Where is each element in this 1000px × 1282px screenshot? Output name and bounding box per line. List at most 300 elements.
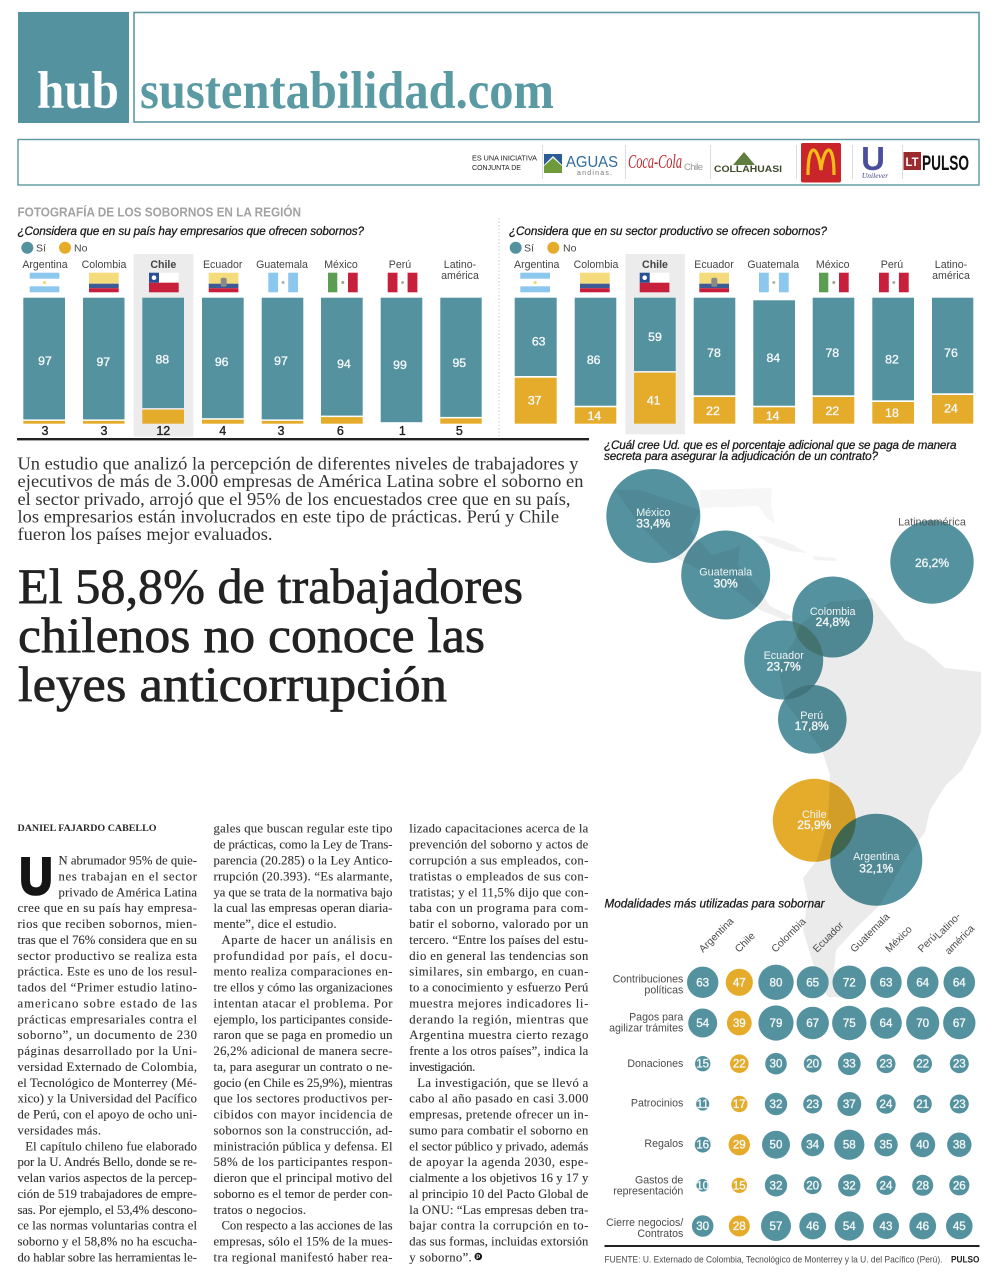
article column 2: parencia (20.285) o la Ley Antico- bbox=[214, 854, 392, 868]
row: Patrocinios: 11 bbox=[697, 1098, 709, 1111]
label: Latinoamérica: 26,2% bbox=[915, 556, 949, 570]
column: Colombia: Colombia bbox=[574, 259, 618, 271]
column headers: Chile bbox=[733, 931, 758, 955]
column: Latinoamérica: 5 bbox=[456, 424, 463, 438]
sponsors intro text bbox=[472, 154, 538, 172]
row: Cierre negocios / Contratos: 45 bbox=[953, 1220, 966, 1233]
article column 2: dieron que el principal motivo del bbox=[214, 1171, 393, 1185]
logo: LT Pulso: LT bbox=[906, 155, 919, 169]
label: Argentina: Argentina bbox=[853, 851, 899, 863]
icon: end mark: P bbox=[476, 1255, 480, 1261]
article column 2: cibidos con mayor incidencia de bbox=[214, 1108, 393, 1122]
column headers: Argentina bbox=[697, 916, 736, 955]
row: Contribuciones políticas: 63 bbox=[880, 976, 892, 989]
row: Gastos de representación bbox=[613, 1174, 969, 1197]
Chile highlight bbox=[134, 254, 193, 437]
column headers: américa bbox=[943, 923, 977, 957]
article column 3: corrupción a sus empleados, con- bbox=[409, 854, 588, 868]
column headers: Guatemala bbox=[849, 912, 892, 955]
row: Patrocinios: 21 bbox=[916, 1098, 929, 1111]
article column 1: tados del “Primer estudio latino- bbox=[18, 980, 197, 994]
column: Colombia: 86 bbox=[587, 353, 601, 367]
label: México: 33,4% bbox=[636, 516, 671, 530]
article column 3: taba con un programa para com- bbox=[409, 901, 588, 915]
article column 3: dio en general las tendencias son bbox=[409, 949, 589, 963]
row: Pagos para agilizar trámites: Pagos para bbox=[629, 1012, 683, 1024]
Chile highlight bbox=[625, 254, 685, 434]
row: Donaciones: 22 bbox=[733, 1058, 746, 1071]
row: Gastos de representación: 24 bbox=[880, 1179, 893, 1192]
column: Argentina: 97 bbox=[38, 354, 52, 368]
logo: Collahuasi: COLLAHUASI bbox=[714, 164, 782, 175]
article column 3: frente a los otros países”, indica la bbox=[409, 1044, 589, 1058]
article column 1: rios que reciben sobornos, mien- bbox=[18, 917, 197, 931]
row: Gastos de representación: representación bbox=[613, 1185, 683, 1197]
article column 3: batir el soborno, valorado por un bbox=[409, 917, 589, 931]
row: Pagos para agilizar trámites: 67 bbox=[806, 1017, 819, 1030]
article column 2: soborno es el temor de perder con- bbox=[214, 1187, 392, 1201]
map question bbox=[604, 439, 957, 463]
article column 1: do hablar sobre las herramientas le- bbox=[18, 1250, 197, 1264]
chart question: ¿Considera que en su país hay empresarios que ofrecen sobornos? bbox=[18, 225, 364, 238]
legend bbox=[510, 242, 577, 254]
intro paragraph: fueron los países mejor evaluados. bbox=[18, 524, 272, 544]
row: Regalos: 40 bbox=[916, 1139, 929, 1152]
byline: DANIEL FAJARDO CABELLO bbox=[18, 823, 157, 834]
column: Chile bbox=[142, 259, 184, 438]
row: Patrocinios: 37 bbox=[843, 1098, 856, 1111]
article column 1: práctica. Este es uno de los resul- bbox=[18, 965, 197, 979]
article column 3: lizado capacitaciones acerca de la bbox=[409, 822, 589, 836]
article column 2: 58% de los participantes respon- bbox=[214, 1155, 392, 1169]
logo: Unilever bbox=[852, 140, 903, 180]
headline bbox=[18, 558, 523, 712]
article column 2: intentan atacar el problema. Por bbox=[214, 996, 393, 1010]
row: Gastos de representación: 32 bbox=[843, 1179, 856, 1192]
row: Patrocinios: 23 bbox=[953, 1098, 966, 1111]
article column 1: sector productivo se realiza esta bbox=[18, 949, 197, 963]
map question: secreta para asegurar la adjudicación de un contrato? bbox=[604, 450, 878, 463]
header: hub logo block bbox=[18, 12, 129, 123]
row: Gastos de representación: 26 bbox=[953, 1179, 966, 1192]
article column 1: prácticas empresariales contra el bbox=[18, 1012, 197, 1026]
column: México: 78 bbox=[825, 346, 839, 360]
article column 1: soborno”, un documento de 230 bbox=[18, 1028, 197, 1042]
row: Contribuciones políticas: 80 bbox=[770, 976, 782, 989]
map: Latin America bbox=[615, 488, 981, 997]
row: Pagos para agilizar trámites: 67 bbox=[953, 1017, 966, 1030]
column: Chile: 59 bbox=[648, 330, 662, 344]
column: Guatemala: 84 bbox=[766, 351, 780, 365]
column: Perú bbox=[381, 259, 422, 438]
article column 3: empresas, pretende ofrecer un in- bbox=[409, 1108, 588, 1122]
logo: Coca-Cola Chile: Coca-Cola bbox=[628, 151, 682, 173]
row: Cierre negocios / Contratos: 46 bbox=[806, 1220, 819, 1233]
header: site name box bbox=[134, 12, 979, 122]
label: Guatemala bbox=[699, 566, 752, 590]
drop cap: U bbox=[20, 848, 52, 906]
row: Pagos para agilizar trámites: 54 bbox=[696, 1017, 710, 1030]
row: Patrocinios bbox=[631, 1092, 969, 1116]
column: Perú: 99 bbox=[393, 358, 407, 372]
article column 1 bbox=[18, 848, 198, 1264]
column: Guatemala: Guatemala bbox=[747, 259, 799, 271]
article column 2: ta, para asegurar un contrato o ne- bbox=[214, 1060, 392, 1074]
column: Chile: 41 bbox=[647, 394, 661, 408]
row: Cierre negocios / Contratos: Contratos bbox=[637, 1228, 683, 1240]
logo: Aguas Andinas: andinas. bbox=[577, 170, 612, 177]
column: Colombia: 97 bbox=[96, 355, 110, 369]
label: Ecuador: 23,7% bbox=[767, 660, 801, 674]
row: Contribuciones políticas: Contribuciones bbox=[613, 973, 683, 985]
article column 2: ejemplo, los participantes conside- bbox=[214, 1012, 392, 1026]
column: México: México bbox=[324, 259, 358, 271]
article column 2: tre ellos y cómo las organizaciones bbox=[214, 980, 393, 994]
row: Patrocinios: 17 bbox=[733, 1098, 746, 1111]
article column 3: tercero. “Entre los países del estu- bbox=[409, 933, 588, 947]
column: Colombia: 14 bbox=[587, 409, 601, 423]
column: Perú: 18 bbox=[885, 406, 899, 420]
article column 3: investigación. bbox=[409, 1060, 475, 1074]
label: Argentina: 32,1% bbox=[859, 862, 894, 876]
column: Guatemala: 14 bbox=[766, 409, 780, 423]
row: Gastos de representación: 32 bbox=[770, 1179, 782, 1192]
modalities heading: Modalidades más utilizadas para sobornar bbox=[604, 898, 826, 910]
legend: Sí bbox=[36, 242, 46, 254]
article column 2: raron que se paga en promedio un bbox=[214, 1028, 393, 1042]
row: Gastos de representación: 10 bbox=[696, 1179, 709, 1192]
column: Guatemala: 97 bbox=[274, 354, 288, 368]
article column 3: de apoyar la agenda 2030, espe- bbox=[409, 1155, 588, 1169]
column headers: Latino- bbox=[933, 911, 963, 941]
article column 3: tratistas; y el 11,5% dijo que con- bbox=[409, 885, 588, 899]
article column 3: tratistas o empleados de sus con- bbox=[409, 869, 588, 883]
column: Argentina: 63 bbox=[532, 334, 546, 348]
row: Pagos para agilizar trámites: 79 bbox=[770, 1017, 782, 1030]
column: Chile: Chile bbox=[642, 259, 668, 271]
article column 1: N abrumador 95% de quie- bbox=[58, 854, 197, 868]
article column 3: cabo al año pasado en casi 3.000 bbox=[409, 1092, 588, 1106]
label: Colombia: Colombia bbox=[810, 606, 856, 618]
row: Regalos: 16 bbox=[696, 1139, 709, 1152]
article column 1: versidades más. bbox=[18, 1124, 101, 1138]
panel: bribery in country chart bbox=[18, 225, 482, 438]
row: Donaciones: 15 bbox=[696, 1058, 709, 1071]
column: Perú: Perú bbox=[389, 259, 411, 271]
headline: chilenos no conoce las bbox=[18, 607, 485, 663]
column: Ecuador: 22 bbox=[706, 404, 720, 418]
label: México: México bbox=[636, 507, 670, 519]
column: Colombia: Colombia bbox=[82, 259, 126, 271]
label: Argentina bbox=[853, 851, 899, 876]
intro paragraph: ejecutivos de más de 3.000 empresas de América Latina sobre el soborno en bbox=[18, 471, 584, 491]
label: Guatemala: Guatemala bbox=[699, 566, 752, 578]
source note: PULSO bbox=[951, 1255, 980, 1265]
row: Cierre negocios / Contratos bbox=[606, 1211, 973, 1241]
row: Regalos: 58 bbox=[843, 1139, 856, 1152]
article column 1: privado de América Latina bbox=[58, 885, 197, 899]
column: Guatemala: 3 bbox=[278, 424, 285, 438]
label: México bbox=[636, 507, 671, 530]
article column 1: por la U. Andrés Bello, donde se re- bbox=[18, 1155, 197, 1169]
article column 2: Con respecto a las acciones de las bbox=[222, 1219, 393, 1233]
row: Donaciones: Donaciones bbox=[627, 1058, 683, 1070]
label: Latinoamérica bbox=[898, 516, 966, 570]
article column 2: gocio (en Chile es 25,9%), mientras bbox=[214, 1076, 393, 1090]
article column 1: el Tecnológico de Monterrey (Mé- bbox=[18, 1076, 197, 1090]
column: Latinoamérica: 24 bbox=[944, 402, 958, 416]
article column 3: la ONU: “Las empresas deben tra- bbox=[409, 1203, 588, 1217]
row: Cierre negocios / Contratos: Cierre negocios/ bbox=[606, 1217, 683, 1229]
article column 2: la cual las empresas operan diaria- bbox=[214, 901, 392, 915]
row: Pagos para agilizar trámites: 75 bbox=[843, 1017, 856, 1030]
article column 2: empresas, sólo el 15% de la mues- bbox=[214, 1235, 392, 1249]
column: Ecuador: 78 bbox=[707, 346, 721, 360]
article column 2: gales que buscan regular este tipo bbox=[214, 822, 392, 836]
column headers: Colombia bbox=[770, 916, 809, 955]
row: Patrocinios: 32 bbox=[770, 1098, 782, 1111]
article column 1: de Perú, con el apoyo de ocho uni- bbox=[18, 1108, 197, 1122]
row: Donaciones: 33 bbox=[843, 1058, 856, 1071]
intro paragraph bbox=[18, 454, 584, 544]
legend: No bbox=[563, 242, 577, 254]
column: Perú: 82 bbox=[885, 352, 899, 366]
article column 1: nes trabajan en el sector bbox=[58, 869, 198, 883]
column: Argentina: Argentina bbox=[514, 259, 559, 271]
column: México: México bbox=[816, 259, 850, 271]
article column 1: xico) y la Universidad del Pacífico bbox=[18, 1092, 197, 1106]
column: Latinoamérica bbox=[932, 259, 973, 424]
logo: LT Pulso: PULSO bbox=[922, 152, 969, 175]
icon: end mark bbox=[474, 1253, 482, 1261]
article column 3: to a conocimiento y esfuerzo Perú bbox=[409, 980, 589, 994]
label: Latinoamérica: Latinoamérica bbox=[898, 516, 966, 528]
column: Ecuador: Ecuador bbox=[694, 259, 734, 271]
row: Contribuciones políticas: 65 bbox=[806, 976, 819, 989]
article column 3: muestra mejores indicadores li- bbox=[409, 996, 588, 1010]
row: Gastos de representación: Gastos de bbox=[635, 1174, 683, 1186]
article column 2: de prácticas, como la Ley de Trans- bbox=[214, 838, 392, 852]
column headers bbox=[697, 911, 977, 957]
article column 2: rrupción (20.393). “Es alarmante, bbox=[214, 869, 392, 883]
article column 3: sumo para combatir el soborno en bbox=[409, 1124, 589, 1138]
article column 1: sas. Por ejemplo, el 53,4% descono- bbox=[18, 1203, 197, 1217]
article column 3: Argentina muestra cierto rezago bbox=[409, 1028, 588, 1042]
row: Regalos: Regalos bbox=[644, 1138, 683, 1150]
row: Contribuciones políticas: 64 bbox=[916, 976, 930, 989]
row: Donaciones: 23 bbox=[880, 1058, 892, 1071]
row: Gastos de representación: 20 bbox=[806, 1179, 819, 1192]
column: Argentina: 37 bbox=[528, 394, 542, 408]
row: Contribuciones políticas: 72 bbox=[843, 976, 856, 989]
article column 2: ya que se trata de la normativa bajo bbox=[214, 885, 392, 899]
column: México: 94 bbox=[337, 357, 351, 371]
header: site name box: sustentabilidad.com bbox=[140, 62, 554, 120]
article column 2: tratos o negocios. bbox=[214, 1203, 306, 1217]
row: Donaciones: 22 bbox=[916, 1058, 929, 1071]
column: Perú: Perú bbox=[881, 259, 903, 271]
row: Cierre negocios / Contratos: 30 bbox=[696, 1220, 709, 1233]
column: Argentina: Argentina bbox=[22, 259, 68, 271]
source note: FUENTE: U. Externado de Colombia, Tecnológico de Monterrey y la U. del Pacífico (Perú). bbox=[604, 1255, 942, 1265]
row: Patrocinios: Patrocinios bbox=[631, 1098, 683, 1110]
article column 1: soborno y el 58,8% no ha escucha- bbox=[18, 1235, 197, 1249]
row: Gastos de representación: 15 bbox=[733, 1179, 746, 1192]
column: Argentina bbox=[22, 259, 68, 438]
column: Ecuador bbox=[694, 259, 735, 424]
column: Chile bbox=[634, 259, 676, 424]
logo: LT Pulso bbox=[904, 152, 969, 175]
column: Colombia: 3 bbox=[101, 424, 108, 438]
row: Donaciones: 20 bbox=[806, 1058, 819, 1071]
row: Cierre negocios / Contratos: 54 bbox=[843, 1220, 856, 1233]
label: Perú: Perú bbox=[800, 710, 823, 722]
column: Latinoamérica: américa bbox=[932, 270, 970, 282]
legend: Sí bbox=[524, 242, 534, 254]
article column 1: ción de 519 trabajadores de empre- bbox=[18, 1187, 197, 1201]
row: Pagos para agilizar trámites: 39 bbox=[733, 1017, 746, 1030]
row: Contribuciones políticas: políticas bbox=[644, 985, 683, 997]
intro paragraph: los empresarios están involucrados en este tipo de prácticas. Perú y Chile bbox=[18, 506, 559, 526]
column: Guatemala bbox=[256, 259, 308, 438]
label: Colombia: 24,8% bbox=[816, 615, 850, 629]
article column 1: cree que en su país hay empresa- bbox=[18, 901, 197, 915]
row: Regalos: 34 bbox=[806, 1139, 820, 1152]
article column 3: el sector público y privado, además bbox=[409, 1139, 588, 1153]
article column 3: prevención del soborno y actos de bbox=[409, 838, 589, 852]
label: Colombia bbox=[810, 606, 856, 629]
article column 3 bbox=[409, 822, 589, 1264]
row: Pagos para agilizar trámites: agilizar trámites bbox=[609, 1022, 683, 1034]
label: Perú: 17,8% bbox=[795, 719, 829, 733]
article column 2: que los sectores productivos per- bbox=[214, 1092, 392, 1106]
column headers: Perú bbox=[916, 932, 940, 955]
row: Donaciones: 23 bbox=[953, 1058, 966, 1071]
article column 3: y soborno”. bbox=[409, 1250, 472, 1264]
article column 1: ce las normas voluntarias contra el bbox=[18, 1219, 197, 1233]
article column 2: mento realiza comparaciones en- bbox=[214, 965, 392, 979]
row: Contribuciones políticas bbox=[613, 965, 975, 1000]
logo: Coca-Cola Chile bbox=[625, 145, 703, 179]
column: Latinoamérica: 76 bbox=[944, 346, 958, 360]
row: Contribuciones políticas: 64 bbox=[953, 976, 966, 989]
logo: Aguas Andinas: AGUAS bbox=[566, 154, 618, 171]
row: Pagos para agilizar trámites: 70 bbox=[916, 1017, 929, 1030]
column: Guatemala bbox=[747, 259, 799, 424]
sponsors bar bbox=[18, 140, 979, 185]
logo: Collahuasi bbox=[710, 145, 782, 179]
row: Contribuciones políticas: 47 bbox=[733, 976, 746, 989]
article column 1: versidad Externado de Colombia, bbox=[18, 1060, 197, 1074]
column: Chile: 88 bbox=[155, 352, 169, 366]
map question: ¿Cuál cree Ud. que es el porcentaje adicional que se paga de manera bbox=[604, 439, 957, 452]
row: Patrocinios: 23 bbox=[806, 1098, 819, 1111]
article column 2: Aparte de hacer un análisis en bbox=[222, 933, 393, 947]
article column 1: velan varios aspectos de la percep- bbox=[18, 1171, 197, 1185]
column: Latinoamérica: 95 bbox=[452, 356, 466, 370]
column: Latinoamérica: Latino- bbox=[444, 259, 477, 271]
row: Patrocinios: 24 bbox=[880, 1098, 893, 1111]
column: Argentina bbox=[514, 259, 559, 424]
row: Pagos para agilizar trámites: 64 bbox=[880, 1017, 893, 1030]
article column 2 bbox=[214, 822, 393, 1264]
logo: Unilever: U bbox=[861, 140, 885, 177]
article column 2: ministración pública y defensa. El bbox=[214, 1139, 393, 1153]
row: Cierre negocios / Contratos: 28 bbox=[733, 1220, 746, 1233]
column headers: México bbox=[884, 924, 915, 955]
column: Latinoamérica bbox=[440, 259, 482, 438]
logo: Coca-Cola Chile: Chile bbox=[684, 162, 703, 173]
label: Ecuador: Ecuador bbox=[764, 650, 804, 662]
row: Regalos bbox=[644, 1130, 972, 1160]
article column 1: tras que el 76% considera que en su bbox=[18, 933, 198, 947]
article column 3: cialmente a los objetivos 16 y 17 y bbox=[409, 1171, 589, 1185]
article column 1: El capítulo chileno fue elaborado bbox=[25, 1139, 197, 1153]
legend: No bbox=[74, 242, 88, 254]
article column 2: 26,2% adicional de manera secre- bbox=[214, 1044, 392, 1058]
column: Colombia bbox=[574, 259, 618, 424]
article column 3: das sus formas, incluidas extorsión bbox=[409, 1235, 589, 1249]
article column 3: La investigación, que se llevó a bbox=[417, 1076, 589, 1090]
column: Argentina: 3 bbox=[42, 424, 49, 438]
label: Chile: 25,9% bbox=[797, 818, 832, 832]
row: Gastos de representación: 28 bbox=[916, 1179, 929, 1192]
headline: El 58,8% de trabajadores bbox=[18, 558, 523, 614]
column: Ecuador: 96 bbox=[215, 355, 229, 369]
column: Chile: Chile bbox=[150, 259, 176, 271]
article column 2: tra regional manifestó haber rea- bbox=[214, 1250, 392, 1264]
label: Ecuador bbox=[764, 650, 804, 674]
article column 1: páginas desarrollado por la Uni- bbox=[18, 1044, 197, 1058]
legend bbox=[21, 242, 88, 254]
header: hub logo block: hub bbox=[37, 62, 119, 120]
intro paragraph: el sector privado, arrojó que el 95% de los encuestados cree que en su país, bbox=[18, 489, 570, 509]
label: Chile: Chile bbox=[802, 809, 827, 821]
article column 3: derando la región, mientras que bbox=[409, 1012, 589, 1026]
column: Perú bbox=[872, 259, 914, 424]
row: Regalos: 35 bbox=[880, 1139, 892, 1152]
sponsors intro text: ES UNA INICIATIVA bbox=[472, 154, 538, 162]
article column 2: profundidad por país, el docu- bbox=[214, 949, 392, 963]
bubble circles bbox=[606, 469, 974, 906]
row: Regalos: 29 bbox=[733, 1139, 746, 1152]
headline: leyes anticorrupción bbox=[18, 656, 447, 712]
intro paragraph: Un estudio que analizó la percepción de diferentes niveles de trabajadores y bbox=[18, 454, 579, 474]
row: Donaciones: 30 bbox=[770, 1058, 782, 1071]
row: Cierre negocios / Contratos: 43 bbox=[880, 1220, 892, 1233]
label: Guatemala: 30% bbox=[714, 576, 738, 590]
label: Chile bbox=[797, 809, 832, 832]
logo: McDonald's bbox=[796, 143, 841, 182]
column: México: 22 bbox=[825, 404, 839, 418]
column: Colombia bbox=[82, 259, 126, 438]
bubbles: additional percentage by country bbox=[606, 469, 974, 906]
row: Cierre negocios / Contratos: 46 bbox=[916, 1220, 929, 1233]
row: Contribuciones políticas: 63 bbox=[696, 976, 709, 989]
column: Chile: 12 bbox=[156, 424, 170, 438]
article column 3: similares, sin embargo, en cuan- bbox=[409, 965, 588, 979]
column: Latinoamérica: américa bbox=[441, 270, 479, 282]
row: Regalos: 50 bbox=[770, 1139, 782, 1152]
article column 3: al principio 10 del Pacto Global de bbox=[409, 1187, 589, 1201]
row: Regalos: 38 bbox=[953, 1139, 966, 1152]
article column 3: bajar contra la corrupción en to- bbox=[409, 1219, 588, 1233]
logo: Aguas Andinas bbox=[542, 145, 618, 179]
article column 2: mente”, dice el estudio. bbox=[214, 917, 336, 931]
column: Ecuador: Ecuador bbox=[203, 259, 243, 271]
column: México bbox=[321, 259, 363, 438]
column: Ecuador bbox=[202, 259, 244, 438]
